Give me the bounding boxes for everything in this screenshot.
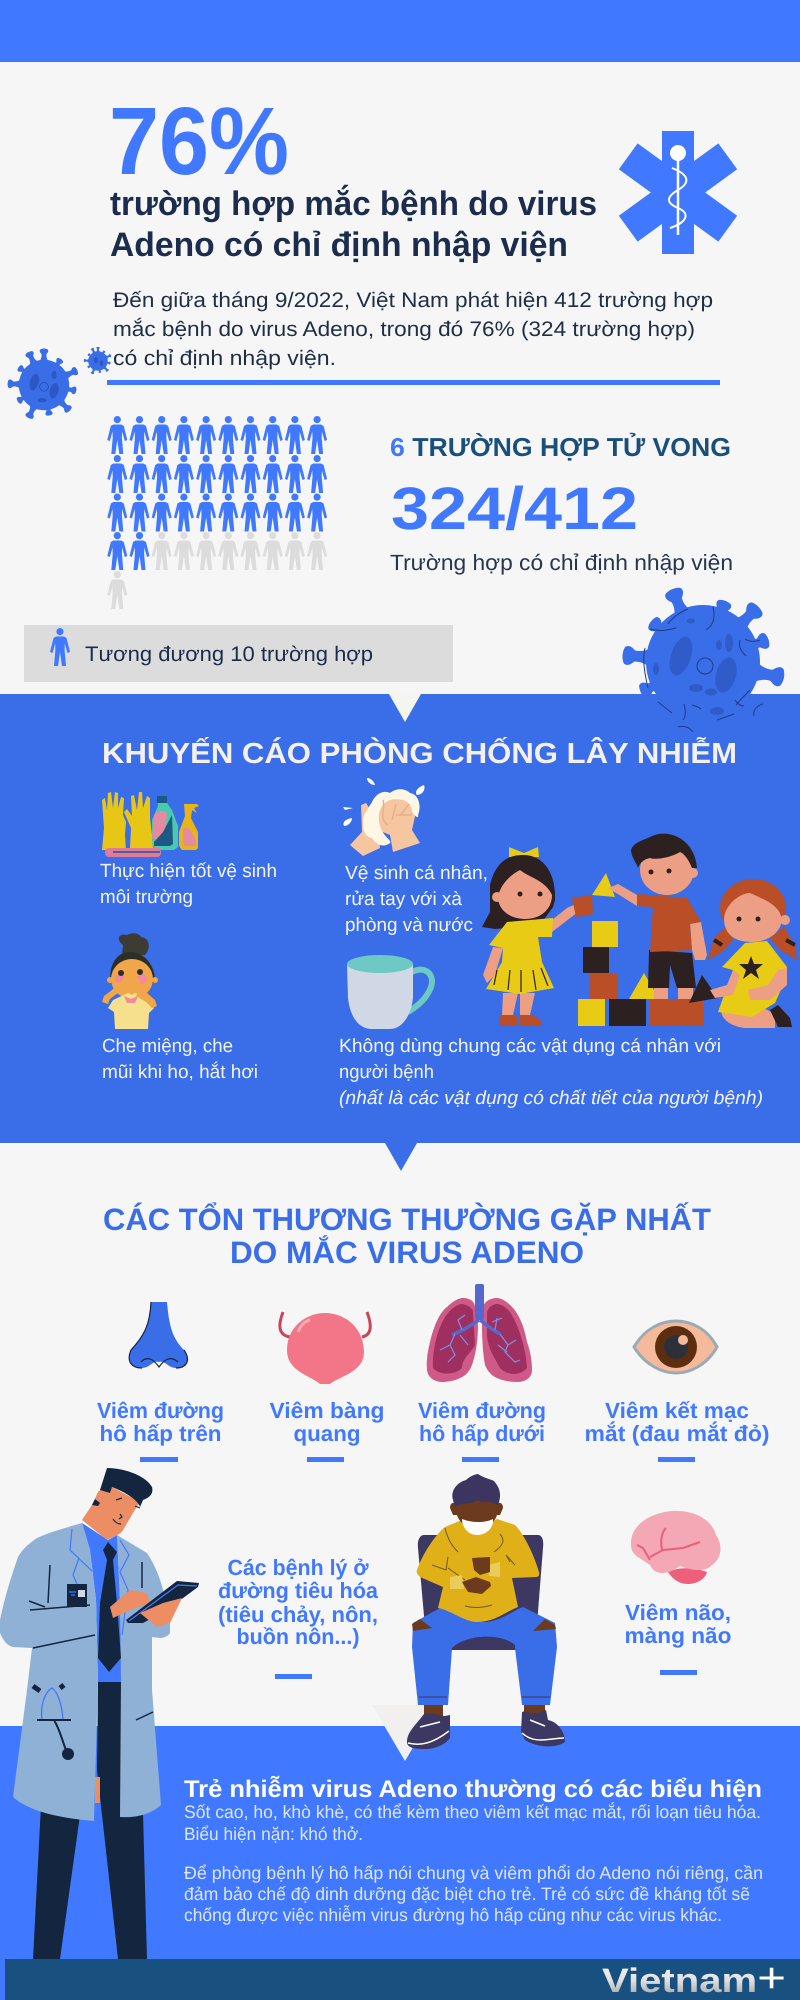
label: lower respiratory: Viêm đường <box>418 1398 546 1423</box>
child: girl with bow <box>482 847 578 1026</box>
symptoms heading: Trẻ nhiễm virus Adeno thường có các biểu hiện <box>184 1775 762 1803</box>
icon: lungs <box>427 1284 532 1382</box>
text: environment hygiene: môi trường <box>100 887 193 908</box>
label: conjunctivitis: Viêm kết mạc <box>605 1398 749 1423</box>
big statistic 76%: 76% <box>109 88 289 195</box>
deaths heading: 6 TRƯỜNG HỢP TỬ VONG <box>390 432 731 462</box>
symptoms text: Sốt cao, ho, khò khè, có thể kèm theo viêm kết mạc mắt, rối loạn tiêu hóa. <box>184 1802 761 1822</box>
label: digestive tract: buồn nôn...) <box>236 1624 360 1649</box>
coat seams <box>29 1562 142 1648</box>
text: do not share personal items: Không dùng chung các vật dụng cá nhân với <box>339 1036 721 1057</box>
icon: large virus spikes above panel <box>621 584 787 703</box>
icon: brain <box>631 1511 721 1584</box>
tie <box>98 1542 121 1672</box>
intro paragraph: có chỉ định nhập viện. <box>113 347 336 370</box>
illustration: children playing with blocks <box>482 834 797 1028</box>
icon: girl covering mouth <box>102 933 158 1029</box>
headline <box>110 184 597 264</box>
label: lower respiratory <box>418 1398 546 1462</box>
lab coat left <box>0 1523 98 1821</box>
label: bladder <box>270 1398 384 1462</box>
lab coat right <box>117 1535 170 1817</box>
child: boy <box>608 834 707 999</box>
icon: bladder <box>280 1312 370 1384</box>
icon: eye <box>634 1321 717 1373</box>
text: personal hygiene: phòng và nước <box>345 915 473 936</box>
jeans <box>412 1607 557 1705</box>
illustration: doctor with tablet <box>0 1468 199 1959</box>
prevention text: đảm bảo chế độ dinh dưỡng đặc biệt cho trẻ. Trẻ có sức đề kháng tốt sẽ <box>184 1884 750 1904</box>
label: bladder: quang <box>294 1421 360 1446</box>
building blocks <box>572 873 703 1026</box>
statistic 324/412: 324/412 <box>391 475 638 542</box>
tablet and hands <box>110 1590 150 1618</box>
icon: gloves and cleaning bottles <box>102 792 199 857</box>
pointer triangle <box>372 1705 438 1761</box>
label: meningitis: Viêm não, <box>625 1600 731 1625</box>
statistic caption: Trường hợp có chỉ định nhập viện <box>390 550 733 575</box>
ears <box>450 1503 503 1515</box>
top banner <box>0 0 800 62</box>
label: lower respiratory: hô hấp dưới <box>419 1421 545 1446</box>
label: digestive tract <box>218 1555 379 1679</box>
prevention text <box>184 1863 763 1925</box>
label: upper respiratory: hô hấp trên <box>100 1421 222 1446</box>
text: cover mouth and nose <box>102 1036 258 1083</box>
icon: hand washing with soap <box>343 778 425 856</box>
trousers <box>33 1682 147 1959</box>
icon: nose <box>129 1302 188 1368</box>
headline: trường hợp mắc bệnh do virus <box>110 184 597 223</box>
symptoms text <box>184 1802 761 1844</box>
panel: symptoms <box>0 1705 800 2000</box>
blue people rows <box>107 416 327 570</box>
hands <box>462 1557 491 1594</box>
text: cover mouth and nose: Che miệng, che <box>102 1036 233 1057</box>
text: do not share personal items: (nhất là các vật dụng có chất tiết của người bệnh) <box>339 1088 763 1109</box>
intro paragraph: Đến giữa tháng 9/2022, Việt Nam phát hiện 412 trường hợp <box>113 289 713 312</box>
text: do not share personal items: người bệnh <box>339 1062 434 1083</box>
text: environment hygiene <box>100 861 277 908</box>
child: girl with braids <box>708 879 797 1028</box>
cuffs <box>450 1562 500 1589</box>
icon: medical star of life <box>619 131 737 254</box>
text: personal hygiene: rửa tay với xà <box>345 889 462 910</box>
head <box>82 1487 140 1540</box>
intro paragraph <box>113 289 713 370</box>
pointer triangle <box>385 1143 417 1171</box>
heading: common lesions <box>103 1202 711 1270</box>
icon: medium virus <box>7 349 80 421</box>
divider rule <box>107 380 720 385</box>
label: meningitis: màng não <box>624 1623 732 1648</box>
headline: Adeno có chỉ định nhập viện <box>110 226 568 264</box>
label: digestive tract: Các bệnh lý ở <box>228 1555 369 1580</box>
prevention text: Để phòng bệnh lý hô hấp nói chung và viêm phổi do Adeno nói riêng, cần <box>184 1863 763 1883</box>
hair <box>452 1474 500 1507</box>
logo: Vietnam+: Vietnam + <box>602 1954 786 2000</box>
heading: common lesions: DO MẮC VIRUS ADENO <box>230 1235 584 1270</box>
sweater <box>417 1519 539 1622</box>
badge <box>67 1584 87 1607</box>
legend text: Tương đương 10 trường hợp <box>85 643 373 666</box>
label: conjunctivitis <box>584 1398 770 1462</box>
text: personal hygiene: Vệ sinh cá nhân, <box>345 863 488 884</box>
text: cover mouth and nose: mũi khi ho, hắt hơi <box>102 1061 258 1083</box>
text: personal hygiene <box>345 863 488 936</box>
section heading: KHUYẾN CÁO PHÒNG CHỐNG LÂY NHIỄM <box>102 737 737 770</box>
label: upper respiratory <box>97 1398 224 1462</box>
illustration: sick patient on chair <box>407 1474 565 1749</box>
label: digestive tract: (tiêu chảy, nôn, <box>218 1602 378 1627</box>
black triangle block <box>689 975 718 1003</box>
socks <box>424 1705 545 1718</box>
panel: prevention recommendations <box>0 0 800 1171</box>
label: bladder: Viêm bàng <box>270 1398 384 1423</box>
shirt <box>82 1523 122 1682</box>
mask <box>462 1519 493 1535</box>
notch triangle <box>389 694 421 722</box>
label: meningitis <box>624 1600 732 1675</box>
footer bar <box>5 1954 800 2000</box>
face <box>457 1500 497 1528</box>
text: environment hygiene: Thực hiện tốt vệ sinh <box>100 861 277 882</box>
pictogram: 41 of 51 people <box>107 416 327 609</box>
icon: small virus <box>84 347 112 375</box>
shoes <box>407 1710 565 1749</box>
intro paragraph: mắc bệnh do virus Adeno, trong đó 76% (324 trường hợp) <box>113 317 695 341</box>
symptoms text: Biểu hiện nặn: khó thở. <box>184 1824 363 1844</box>
icon: mug <box>347 955 432 1029</box>
prevention text: chống được việc nhiễm virus đường hô hấp cũng như các virus khác. <box>184 1905 722 1925</box>
label: digestive tract: đường tiêu hóa <box>218 1578 379 1603</box>
chair <box>418 1535 543 1650</box>
text: do not share personal items <box>339 1036 763 1109</box>
label: conjunctivitis: mắt (đau mắt đỏ) <box>584 1421 770 1446</box>
icon: stethoscope <box>33 1685 74 1760</box>
icon: legend person <box>50 628 70 666</box>
icon: large virus body <box>610 0 763 732</box>
grey people rows <box>107 532 327 609</box>
label: upper respiratory: Viêm đường <box>97 1398 224 1423</box>
heading: common lesions: CÁC TỔN THƯƠNG THƯỜNG GẶP NHẤT <box>103 1202 711 1237</box>
legend box <box>24 625 453 682</box>
